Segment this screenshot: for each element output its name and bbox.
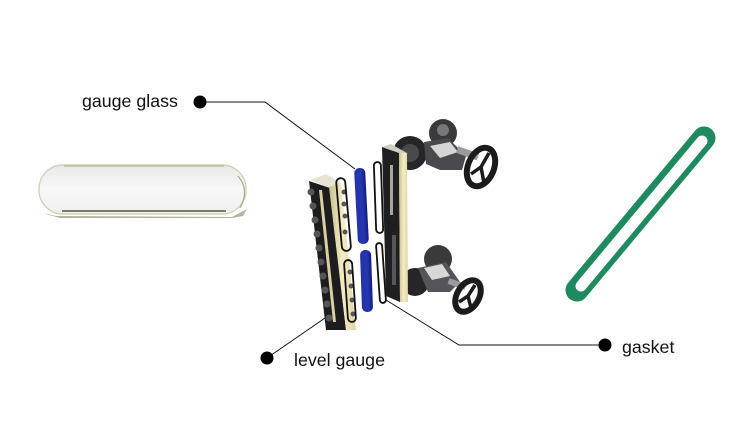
label: level gauge: level gauge bbox=[294, 350, 385, 370]
leader line: level gauge bbox=[267, 318, 325, 358]
lower handwheel bbox=[450, 276, 486, 316]
marker: gasket dot bbox=[598, 338, 612, 352]
lower valve bbox=[401, 245, 486, 316]
leader line: gasket bbox=[386, 300, 605, 345]
left gauge gaskets bbox=[336, 178, 356, 322]
leader line: gauge glass bbox=[200, 102, 355, 169]
right gaskets bbox=[374, 162, 386, 303]
label: gauge glass: gauge glass bbox=[82, 91, 178, 111]
upper valve bbox=[393, 119, 501, 190]
upper handwheel bbox=[461, 144, 501, 190]
icon: green gasket bbox=[577, 138, 704, 290]
marker: level gauge dot bbox=[260, 352, 274, 364]
marker: gauge glass dot bbox=[194, 96, 206, 108]
diagram: exploded level gauge bbox=[308, 119, 501, 330]
blue glass upper bbox=[354, 168, 369, 244]
blue glass lower bbox=[360, 250, 373, 312]
icon: gauge glass photo bbox=[39, 165, 247, 218]
left gauge body bbox=[308, 174, 356, 330]
right gauge plate bbox=[382, 144, 408, 302]
label: gasket: gasket bbox=[622, 337, 674, 357]
